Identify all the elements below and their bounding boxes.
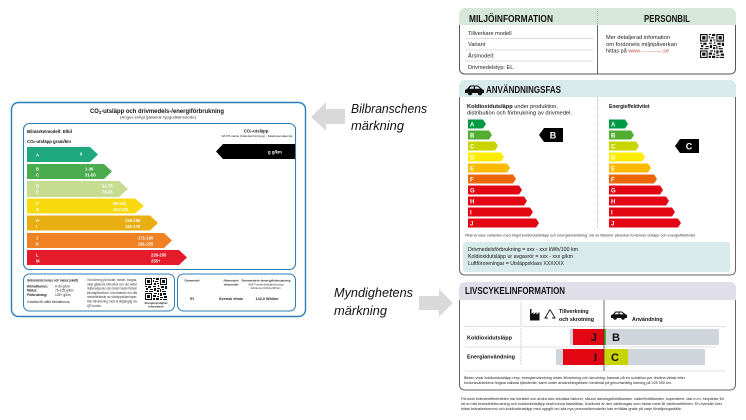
note under lifecycle chart: Bilden visar koldioxidutsläpp resp. energianvändning under tillverkning och skrotning, baserat på en schablon per drivlina viktad efter [464, 376, 686, 380]
CO2 rating bars A to M: H [36, 218, 39, 223]
icon: car small [611, 312, 627, 320]
arrow: pointing left to industry label [311, 102, 345, 131]
more information text: Mer detaljerad infomation [606, 35, 670, 41]
row: energy use: Energianvändning [467, 354, 515, 360]
column heading: manufacturing: Tillverkning [559, 309, 589, 315]
energy rating scale A to J: E [611, 166, 615, 172]
footer note: Förutom bränsleeffektiviteten har körstilet och andra icke-tekniska faktorer, såsom lastningsförhållanden, väderförhållanden, kupévärme, last m.m. betydelse för [461, 397, 725, 401]
label title [90, 108, 224, 120]
energy chart heading: Energieffektivitet [609, 104, 650, 110]
CO2 rating bars A to M: 1-30 [85, 166, 94, 172]
more information text: hittas på www.-----------.se [606, 48, 669, 54]
fuel table text [185, 278, 291, 301]
fuel table text: Drivmedels-/energiförbrukning [242, 278, 291, 282]
energy rating scale A to J: D [611, 156, 616, 162]
header band [459, 8, 736, 25]
CO2 value heading [222, 128, 293, 138]
row: carbon dioxide: Koldioxidutsläpp [467, 336, 512, 342]
arrow: pointing right to authority label [419, 289, 453, 317]
CO2 rating bars A to M: 51-75 [102, 184, 113, 188]
CO2 value black marker [216, 144, 295, 159]
thresholds text: Gränsvärde bonus och malus (skatt) [27, 278, 78, 282]
icon: car [465, 86, 484, 95]
energy rating scale A to J [609, 120, 681, 228]
icon: QR code right [700, 34, 724, 58]
CO2 rating bars A to M: 96-110 [113, 201, 126, 206]
marker: energy class C: C [686, 142, 693, 152]
energy rating scale A to J: J [611, 222, 614, 228]
CO2 value heading: WLTP-värde (blandad körning) - Skattepursläende [222, 134, 293, 138]
CO2 rating bars A to M: 0 [80, 152, 83, 156]
label title: (Anges enligt gällande typgodkännande) [120, 116, 196, 120]
CO2 rating bars A to M: 191-225 [138, 242, 154, 246]
label title: 2 [99, 110, 102, 115]
model and unit headings [27, 129, 72, 144]
vehicle fields: Drivmedelstyp: EL [468, 65, 513, 71]
CO2 rating bars A to M: L [36, 252, 39, 258]
vehicle fields: Tillverkare modell [468, 31, 512, 37]
CO2 rating bars A to M: F [36, 201, 39, 206]
CO2 rating scale A to J: A [470, 122, 475, 128]
note under lifecycle chart: fordonsvariantens högsta valbara tjänstevikt, samt under användningsfasen beräknat på genomsnittlig körning på 225 000 km. [464, 381, 672, 385]
fuel table text: El [190, 297, 194, 301]
fuel table text: drivmedel [224, 282, 238, 286]
thresholds text: 76-125 g/km [55, 289, 74, 293]
note under charts: Pilarna visar varianten med högst koldioxidutsläpp och energianvändning. Val av tillbehör påverkar fordonets utsläpp och energieffektivitet. [465, 234, 696, 238]
vehicle fields: Årsmodell: [468, 52, 495, 60]
panel: miljöinformation [459, 8, 736, 74]
column heading: manufacturing: och skrotning [559, 317, 594, 323]
model and unit headings: Bilmärke/modell: Elbil [27, 129, 72, 134]
thresholds text: Gestäta för alltid klimatbonus. [27, 300, 71, 304]
energy rating scale A to J: G [611, 188, 616, 194]
CO2 rating bars A to M: J [36, 236, 39, 240]
CO2 rating scale A to J [468, 120, 539, 228]
CO2 rating scale A to J: E [470, 166, 474, 172]
CO2 rating bars A to M: 171-190 [138, 236, 154, 240]
fuel table text: Enhet per 100 km/100 km [251, 286, 281, 290]
energy rating scale A to J: F [611, 178, 615, 184]
explanatory text: klimatpåverkan. Information om ditt [87, 291, 137, 295]
column heading: use: Användning [632, 317, 663, 323]
body frame [460, 97, 736, 275]
info box: consumption values [463, 242, 730, 272]
box: fuel table [178, 274, 296, 311]
text: Myndighetens märkning [334, 286, 413, 318]
row: energy use: I [594, 352, 597, 364]
icon: recycling triangle [545, 310, 555, 318]
explanatory text: Vid körning på bioalt. medel, biogas, [87, 278, 137, 282]
CO2 rating bars A to M: B [36, 166, 39, 172]
outer blue frame [12, 102, 306, 316]
icon: factory [530, 309, 540, 320]
thresholds text: Förbrukning: [27, 293, 48, 297]
CO2 rating bars A to M: 126-150 [125, 218, 141, 223]
CO2 rating scale A to J: J [470, 222, 473, 228]
thresholds text: 126+ g/km [55, 293, 71, 297]
marker: energy class C [675, 139, 699, 153]
CO2 rating scale A to J: D [470, 156, 475, 162]
energy rating scale A to J: A [611, 122, 616, 128]
info box: consumption values: Koldioxidutsläpp ur avgasrör = xxx - xxx g/km [468, 254, 573, 260]
CO2 rating bars A to M: 226-255 [151, 252, 167, 258]
more information text [606, 35, 677, 54]
fuel table text: Svensk elmix [219, 297, 244, 301]
explanatory text [87, 278, 138, 308]
label title: CO [90, 108, 99, 115]
explanatory text: väljs gällande bilmodell och det aktivt [87, 282, 137, 286]
row: carbon dioxide: B [612, 332, 620, 344]
CO2 rating bars A to M: 76-95 [102, 190, 113, 194]
icon: QR code left: Information [148, 304, 164, 308]
header band [459, 80, 736, 97]
info box: consumption values: Drivmedelsförbrukning = xxx - xxx kWh/100 km [468, 247, 578, 253]
CO2 rating scale A to J: B [470, 134, 475, 140]
footer note: ett en bils bränsleförbrukning och koldioxidutsläpp skall kunna fastställas. Koldioxid är den växthusgas som bidrar mest till växthuseffekten. En översikt över [461, 402, 723, 406]
vehicle fields [466, 31, 593, 71]
marker: CO2 class B [539, 128, 563, 142]
footer note: bilars bränsleekonomi och koldioxidutsläpp med uppgift om alla nya personbilsmodeller kan erhållas gratis på varje försäljningsställe. [461, 407, 682, 411]
CO2 value heading: CO2-utsläpp [244, 128, 269, 134]
panel: industry label (CO2 and energy) [12, 102, 306, 316]
CO2 rating bars A to M: 255+ [151, 258, 161, 264]
explanatory text: miljöanalyseras utan bioalt medel minskar [87, 287, 138, 291]
CO2 rating scale A to J: F [470, 178, 474, 184]
row: energy use: C [611, 352, 619, 364]
CO2 rating bars A to M: C [36, 172, 39, 178]
body frame [460, 25, 736, 74]
heading personbil: PERSONBIL [644, 14, 690, 25]
energy rating scale A to J: I [611, 210, 613, 216]
thresholds text [27, 278, 78, 304]
CO2 rating bars A to M: I [36, 224, 37, 229]
CO2 rating bars A to M: D [36, 184, 39, 188]
inner CO2 chart frame [24, 124, 296, 270]
label title: -utsläpp och drivmedels-/energiförbrukning [101, 108, 224, 115]
icon: QR code left [145, 278, 167, 308]
CO2 rating bars A to M: E [36, 190, 39, 194]
text: Bilbranschens märkning: Bilbranschens [351, 102, 427, 116]
row: carbon dioxide: J [591, 332, 597, 344]
panel: livscykelinformation [459, 282, 736, 390]
thresholds text: Malus: [27, 289, 37, 293]
vehicle fields: Variant [468, 42, 486, 48]
marker: CO2 class B: B [550, 130, 557, 140]
text: Bilbranschens märkning [351, 102, 427, 133]
CO2 chart heading: Koldioxidutsläpp under produktion, [467, 104, 558, 110]
text: Bilbranschens märkning: märkning [351, 119, 404, 133]
row: energy use [467, 349, 705, 365]
explanatory text: QR-koden. [87, 304, 102, 308]
CO2 rating bars A to M: 111-125 [113, 207, 129, 212]
CO2 rating bars A to M: A [36, 152, 39, 158]
heading: ANVÄNDNINGSFAS [486, 83, 561, 96]
CO2 rating bars A to M: M [36, 258, 40, 264]
CO2 rating scale A to J: C [470, 144, 475, 150]
explanatory text: från tillverkning med el tillgänglig via [87, 300, 137, 304]
energy rating scale A to J: H [611, 200, 615, 206]
info box: consumption values: Luftföroreningar = Utsläppsklass XXXXXX [468, 261, 565, 267]
CO2 rating scale A to J: G [470, 188, 475, 194]
heading: LIVSCYKELINFORMATION [465, 286, 565, 297]
box: thresholds and QR [24, 274, 174, 311]
explanatory text: medelbränsle av utsläppslösningar, [87, 295, 137, 299]
CO2 chart heading [467, 104, 572, 116]
CO2 rating scale A to J: H [470, 200, 474, 206]
icon: QR code left: Energimyndighet [145, 301, 167, 305]
CO2 chart heading: distribution och förbrukning av drivmedel. [467, 110, 572, 116]
energy rating scale A to J: C [611, 144, 616, 150]
heading: MILJÖINFORMATION [469, 12, 553, 25]
text: Myndighetens märkning: Myndighetens [334, 286, 413, 300]
fuel table text: Alternativt [223, 278, 239, 282]
footer note [461, 397, 725, 411]
CO2 rating bars A to M [27, 147, 187, 265]
row: carbon dioxide [467, 329, 719, 345]
model and unit headings: CO2-utsläpp gram/km [27, 139, 71, 144]
fuel table text: WLTP-värde (blandad körning) [248, 282, 284, 286]
fuel table text: 142,0 Wh/km [255, 297, 279, 301]
CO2 rating bars A to M: K [36, 242, 39, 246]
column heading: manufacturing [559, 309, 594, 323]
CO2 rating scale A to J: I [470, 210, 472, 216]
text: Myndighetens märkning: märkning [334, 304, 387, 318]
panel: användningsfas [459, 80, 736, 275]
thresholds text: 0-30 g/km [55, 284, 70, 288]
CO2 rating bars A to M: 151-170 [125, 224, 141, 229]
header band [459, 282, 736, 300]
body frame [460, 300, 736, 390]
energy rating scale A to J: B [611, 134, 616, 140]
fuel table text: Drivmedel [185, 278, 200, 282]
note under lifecycle chart [464, 376, 686, 385]
CO2 rating bars A to M: G [36, 207, 39, 212]
thresholds text: Klimatbonus: [27, 284, 48, 288]
CO2 value black marker: g g/km [268, 150, 282, 154]
CO2 rating bars A to M: 31-50 [85, 172, 96, 178]
more information text: om fordonets miljöpåverkan [606, 41, 677, 48]
